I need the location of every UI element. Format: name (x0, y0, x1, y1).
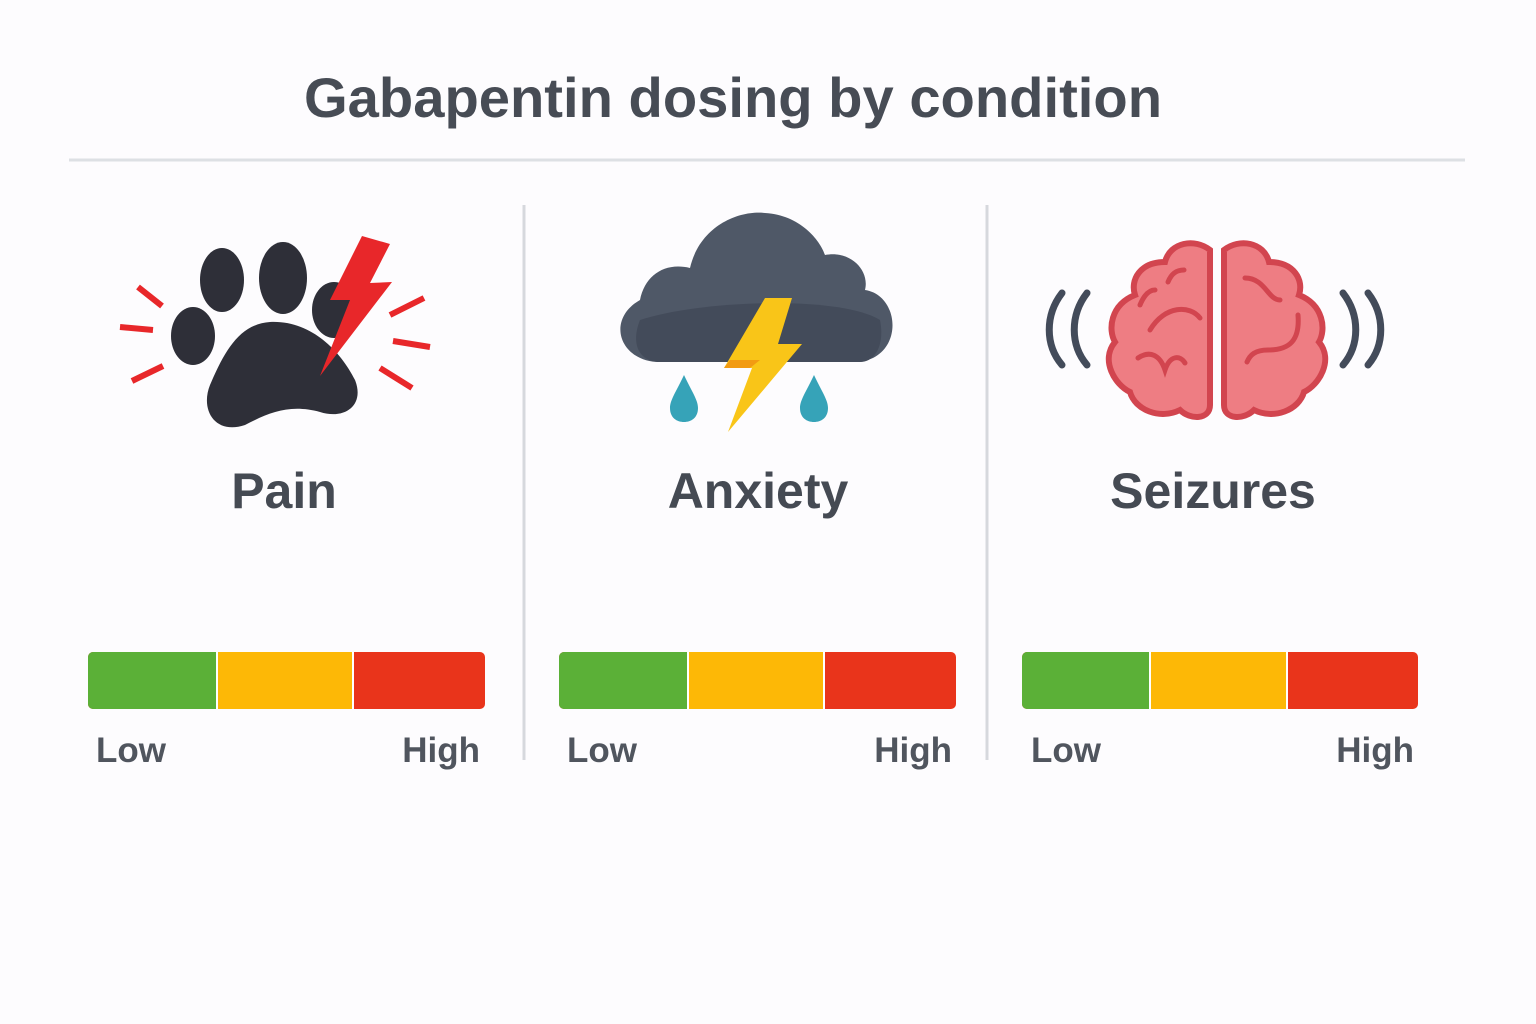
gauge: anxiety: High (874, 731, 952, 770)
panel: pain (88, 236, 485, 770)
icon: brain with waves (1049, 243, 1381, 417)
gauge: seizures: High (1336, 731, 1414, 770)
gauge: anxiety (559, 652, 956, 770)
gauge: anxiety: Low (567, 731, 638, 770)
panel: anxiety (559, 213, 956, 770)
gauge: pain (88, 652, 485, 770)
gauge: seizures: Low (1031, 731, 1102, 770)
icon: paw with lightning (120, 236, 430, 427)
heading: Pain: Pain (231, 463, 337, 519)
gauge: pain: Low (96, 731, 167, 770)
icon: storm cloud (620, 213, 892, 432)
gauge: pain: High (402, 731, 480, 770)
heading: Seizures: Seizures (1110, 463, 1316, 519)
gauge: seizures (1022, 652, 1418, 770)
title: Gabapentin dosing by condition (304, 66, 1162, 129)
panel: seizures (1022, 243, 1418, 770)
heading: Anxiety: Anxiety (668, 463, 848, 519)
